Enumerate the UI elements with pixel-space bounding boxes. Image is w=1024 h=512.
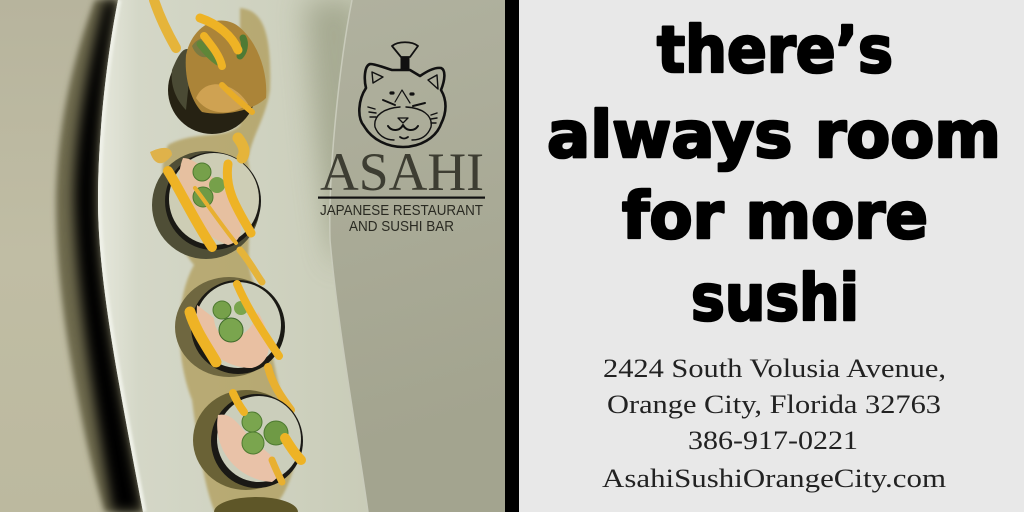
heading: always room <box>547 99 1001 173</box>
vertical black divider <box>505 0 519 512</box>
sauce pool <box>162 8 298 512</box>
sushi roll 3 <box>175 277 291 410</box>
contact details: 386-917-0221 <box>688 426 858 455</box>
panel: sushi photo <box>0 0 505 512</box>
sushi roll 1 <box>154 0 266 134</box>
panel: text background <box>519 0 1024 512</box>
sushi roll 4 <box>193 390 303 490</box>
sushi roll 5 partial <box>214 497 298 512</box>
heading <box>547 14 1001 336</box>
logo: Asahi <box>318 42 485 235</box>
heading: there’s <box>657 14 893 88</box>
logo wordmark: ASAHI <box>320 142 484 202</box>
contact details <box>602 354 946 493</box>
logo subtitle line 1: JAPANESE RESTAURANT <box>320 202 483 219</box>
sushi roll 2 <box>150 138 262 282</box>
contact details: 2424 South Volusia Avenue, <box>603 354 946 383</box>
icon: samurai cat <box>359 42 446 147</box>
contact details: AsahiSushiOrangeCity.com <box>602 464 946 493</box>
divider rule <box>318 196 485 199</box>
heading: for more <box>622 180 928 254</box>
heading: sushi <box>691 262 859 336</box>
logo subtitle line 2: AND SUSHI BAR <box>349 218 454 235</box>
contact details: Orange City, Florida 32763 <box>607 390 941 419</box>
